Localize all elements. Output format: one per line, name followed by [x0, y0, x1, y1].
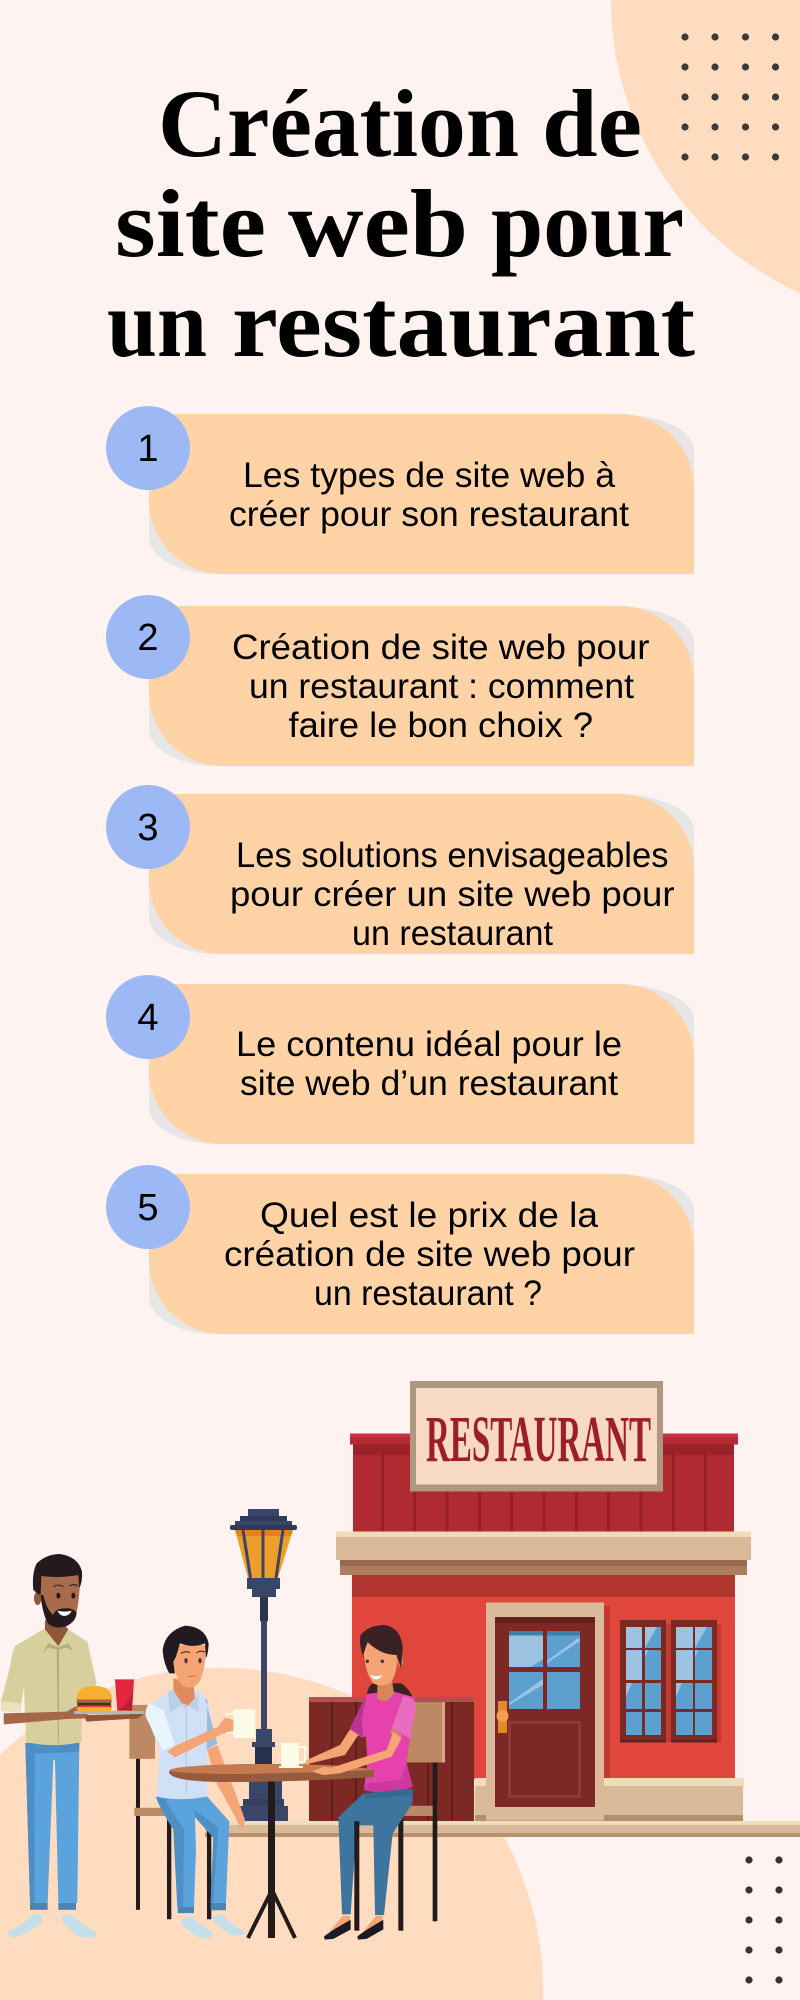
chair behind seated man — [129, 1705, 211, 1919]
waiter head — [33, 1554, 82, 1628]
waiter shirt details — [42, 1643, 73, 1743]
panel: item 5: création de site web pour — [224, 1235, 635, 1274]
panel: item 4 — [106, 975, 694, 1144]
panel: item 3: pour créer un site web pour — [230, 875, 675, 914]
tray — [74, 1711, 144, 1714]
panel: item 2: 2 — [137, 617, 159, 659]
drink cup — [115, 1664, 138, 1711]
waiter sleeve cuff — [1, 1701, 21, 1713]
panel: item 4: Le contenu idéal pour le — [236, 1025, 622, 1064]
woman neck — [377, 1678, 394, 1701]
panel: item 2 — [106, 595, 694, 766]
title: un — [107, 270, 207, 377]
woman front arm — [312, 1732, 402, 1775]
panel: item 1: Les types de site web à — [243, 456, 616, 495]
dot grid top right — [681, 33, 779, 161]
wooden fence — [309, 1697, 474, 1821]
man right arm — [207, 1745, 245, 1830]
title: site — [115, 170, 266, 277]
panel: item 5 — [106, 1165, 694, 1334]
lower wall — [352, 1575, 735, 1779]
panel: item 5: Quel est le prix de la — [260, 1196, 599, 1235]
panel: item 4: 4 — [137, 997, 159, 1039]
window right — [671, 1620, 721, 1742]
foundation step — [475, 1778, 744, 1821]
panel: item 2: faire le bon choix ? — [288, 706, 593, 745]
seated man legs — [156, 1796, 245, 1938]
woman head — [360, 1625, 403, 1685]
panel: item 1: créer pour son restaurant — [229, 495, 629, 534]
woman legs — [324, 1789, 413, 1940]
awning — [336, 1532, 751, 1575]
panel: item 3: un restaurant — [352, 914, 553, 953]
waiter legs — [8, 1743, 96, 1938]
title: Création — [158, 70, 519, 177]
woman upper body — [303, 1625, 416, 1793]
restaurant building — [336, 1381, 751, 1821]
panel: item 1 — [106, 406, 694, 574]
title: de — [542, 70, 642, 177]
panel: item 3: 3 — [137, 807, 159, 849]
decorative peach circle top right — [611, 0, 800, 293]
woman hair back — [367, 1683, 413, 1700]
burger — [77, 1686, 112, 1711]
man arm holding cup — [167, 1717, 233, 1757]
pavement — [205, 1821, 800, 1837]
title: restaurant — [232, 270, 695, 377]
woman top — [350, 1692, 415, 1793]
seated man upper body — [145, 1626, 255, 1830]
waiter arms — [83, 1714, 143, 1722]
man neck and collar — [173, 1678, 195, 1708]
title — [107, 70, 695, 377]
panel: item 4: site web d’un restaurant — [240, 1064, 618, 1103]
dot grid bottom right — [745, 1856, 783, 1984]
man left sleeve — [146, 1703, 175, 1751]
woman sleeve cuff — [390, 1728, 402, 1741]
roof — [350, 1434, 738, 1532]
panel: item 2: un restaurant : comment — [249, 667, 634, 706]
man shirt — [145, 1691, 217, 1799]
waiter neck — [45, 1620, 68, 1646]
woman chair — [363, 1702, 445, 1931]
woman back arm — [303, 1729, 358, 1765]
panel: item 5: un restaurant ? — [314, 1274, 542, 1313]
door — [486, 1602, 610, 1820]
cafe table — [169, 1764, 374, 1938]
title: web — [288, 170, 468, 277]
street lamp — [230, 1509, 297, 1821]
panel: item 3: Les solutions envisageables — [236, 836, 668, 875]
panel: item 2: Création de site web pour — [232, 628, 650, 667]
panel: item 3 — [106, 785, 694, 954]
window left — [620, 1620, 671, 1742]
coffee cup on table — [279, 1743, 305, 1768]
decorative peach circle bottom left — [0, 1668, 543, 2000]
sign: RESTAURANT — [410, 1381, 663, 1492]
man head — [163, 1626, 209, 1687]
waiter shirt — [1, 1628, 97, 1745]
waiter upper body — [1, 1554, 144, 1745]
title: pour — [491, 170, 684, 277]
coffee cup in hand — [220, 1709, 255, 1738]
panel: item 1: 1 — [137, 428, 159, 470]
panel: item 5: 5 — [137, 1187, 159, 1229]
